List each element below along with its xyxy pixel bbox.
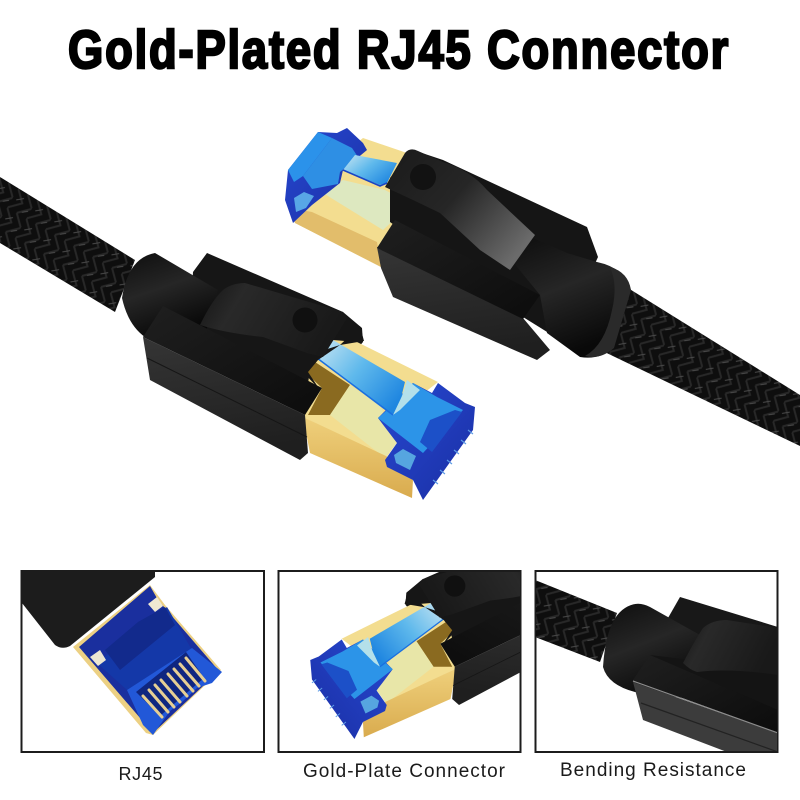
- front lip: [127, 648, 222, 735]
- latch hole, upper: [410, 164, 436, 190]
- lower-left connector and cable: [0, 177, 475, 500]
- blue clip: [317, 340, 475, 500]
- blue base: [79, 586, 219, 733]
- label: Gold-Plate Connector: Gold-Plate Connector: [303, 761, 506, 782]
- housing top, upper: [377, 220, 540, 319]
- back housing: [190, 253, 363, 392]
- blue tray: [97, 607, 192, 690]
- contact ribs: [433, 430, 473, 484]
- zoomed cable and strain relief: [535, 580, 778, 752]
- housing top: [143, 306, 322, 415]
- latch hole: [292, 308, 318, 332]
- panel: Bending Resistance: [535, 571, 778, 752]
- braided cable: [535, 580, 617, 662]
- braided cable, left: [0, 177, 135, 312]
- black housing: [22, 571, 155, 648]
- housing side, upper: [377, 247, 550, 360]
- gold shell, upper: [290, 138, 427, 267]
- gold pins: [143, 658, 205, 717]
- label: RJ45: RJ45: [118, 764, 162, 784]
- collar: [603, 604, 700, 700]
- strain relief collar: [122, 253, 218, 337]
- gold shell: [303, 340, 438, 498]
- latch, upper: [385, 149, 535, 270]
- braided cable, right: [590, 288, 800, 446]
- panel frame: [536, 571, 778, 752]
- back housing, upper: [390, 150, 598, 340]
- panel: Gold-Plate Connector: [278, 570, 522, 753]
- housing side: [633, 682, 778, 752]
- latch: [200, 283, 347, 357]
- main connector artwork: [122, 253, 475, 500]
- strain relief collar, upper: [513, 238, 631, 358]
- white corner tabs: [90, 650, 106, 666]
- blue clip, upper: [285, 128, 397, 223]
- back housing: [668, 597, 776, 634]
- housing notch: [303, 326, 364, 390]
- panel frame: [278, 571, 520, 752]
- housing top: [640, 668, 777, 732]
- latch: [683, 620, 751, 672]
- upper-right connector and cable: [285, 128, 800, 446]
- collar rim: [585, 267, 631, 357]
- connector underside: [22, 571, 222, 735]
- gold edge: [73, 585, 221, 735]
- panel: RJ45: [22, 571, 264, 752]
- zoomed gold connector: [310, 572, 520, 739]
- title: Gold-Plated RJ45 Connector: [68, 19, 728, 80]
- label: Bending Resistance: Bending Resistance: [560, 760, 746, 781]
- housing side: [143, 337, 308, 460]
- panel frame: [22, 571, 264, 752]
